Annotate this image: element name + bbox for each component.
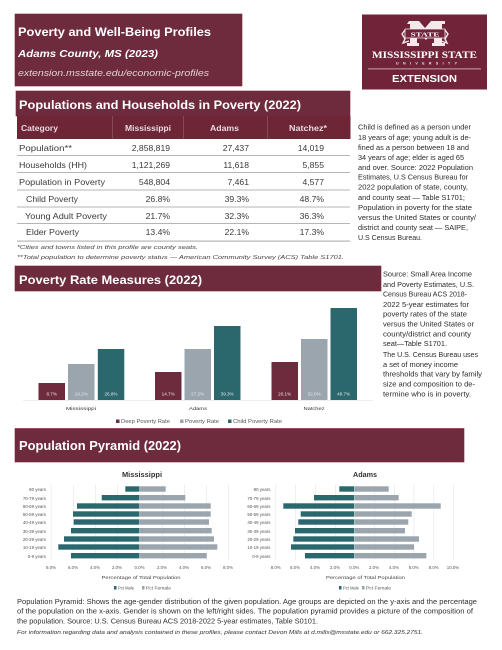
text block: poverty rate sources: thresholds that vary by family: [383, 372, 483, 378]
text block: population definitions and sources: Population in poverty for the state: [358, 205, 472, 212]
table header row: Adams: [210, 124, 240, 133]
bars: Natchez: [272, 308, 357, 411]
footnotes: **Total population to determine poverty status — American Community Survey (ACS) Table S1701.: [17, 255, 344, 261]
x-axis labels: 6.0%: [409, 565, 419, 570]
x-axis labels: 6.0%: [290, 565, 300, 570]
bars: Mississippi: 19.2%: [75, 392, 88, 396]
text block: poverty rate sources: size and composition to de-: [383, 382, 476, 388]
pyramid legend: Pct Male: [118, 586, 135, 590]
row: young adult poverty: Young Adult Poverty: [25, 211, 108, 221]
text block: pyramid explanation: of the population on the x-axis. Gender is shown on the left/right sides. The population pyramid provides a picture of the composition of: [17, 608, 473, 616]
bars: Mississippi: [38, 349, 124, 411]
row: child poverty: Child Poverty: [26, 194, 79, 204]
row: households: [19, 160, 324, 170]
row: population: 27,437: [223, 143, 249, 153]
panel: title banner: Poverty and Well-Being Profiles: [18, 27, 211, 39]
footnotes: *Cities and towns listed in this profile are county seats.: [17, 245, 198, 251]
text block: population definitions and sources: versus the United States or county/: [358, 215, 476, 222]
contact note: For information regarding data and analysis contained in these profiles, please contact Devon Mills at d.mills@msstate.edu or 662.325.2751.: [17, 630, 423, 636]
pyramid legend: [114, 586, 172, 590]
age labels: [247, 487, 271, 559]
text block: poverty rate sources: and Poverty Estimates, U.S.: [383, 282, 474, 289]
age labels: 30-39 years: [23, 529, 47, 534]
bars: Natchez: 32.0%: [308, 392, 321, 396]
x-axis labels: 8.0%: [271, 565, 281, 570]
text block: poverty rate sources: Census Bureau ACS 2018-: [383, 292, 468, 298]
age labels: 10-19 years: [23, 545, 47, 550]
x-axis labels: 8.0%: [46, 565, 56, 570]
x-axis labels: 8.0%: [429, 565, 439, 570]
text block: pyramid explanation: [17, 599, 477, 626]
text block: poverty rate sources: The U.S. Census Bureau uses: [383, 352, 478, 359]
pyramid legend: [339, 586, 392, 590]
age labels: 80 years: [29, 487, 47, 492]
table header row: [17, 116, 350, 139]
age labels: 50-59 years: [23, 512, 47, 517]
panel: title banner: [15, 14, 242, 86]
heading: poverty rate measures: Poverty Rate Measures (2022): [19, 273, 202, 287]
text block: population definitions and sources: 34 years of age; elder is aged 65: [358, 155, 464, 162]
row: population: 2,858,819: [132, 143, 170, 153]
table header row: Mississippi: [125, 124, 171, 133]
x-axis labels: 4.0%: [90, 565, 100, 570]
heading: population pyramid: [15, 428, 464, 462]
row: population: 14,019: [298, 143, 324, 153]
row: young adult poverty: 21.7%: [146, 211, 170, 221]
bars: Mississippi: 26.8%: [104, 392, 118, 396]
female bars: [355, 486, 441, 558]
row: households: Households (HH): [19, 160, 87, 170]
chart legend: Child Poverty Rate: [233, 419, 282, 425]
row: elder poverty: Elder Poverty: [26, 227, 80, 237]
bars: Natchez: 48.7%: [337, 392, 350, 396]
x-axis labels: 2.0%: [112, 565, 122, 570]
row: elder poverty: [26, 227, 324, 237]
text block: poverty rate sources: county/district and county: [383, 332, 472, 338]
logo: Mississippi State University Extension: [362, 14, 487, 90]
bars: Natchez: Natchez: [304, 406, 324, 411]
table: poverty figures: [17, 116, 350, 242]
age labels: 70-79 years: [247, 496, 271, 501]
x-axis labels: [46, 565, 233, 581]
text block: population definitions and sources: and county seat — Table S1701;: [358, 195, 465, 202]
age labels: [23, 487, 47, 559]
age labels: 20-29 years: [247, 537, 271, 542]
age labels: 60-69 years: [247, 504, 271, 509]
age labels: 70-79 years: [23, 496, 47, 501]
chart legend: Deep Poverty Rate: [121, 419, 170, 425]
heading: poverty rate measures: [15, 266, 381, 291]
age labels: 40-49 years: [23, 520, 47, 525]
chart: Adams pyramid: [247, 472, 459, 590]
row: population in poverty: 548,804: [139, 177, 170, 187]
x-axis labels: 4.0%: [389, 565, 399, 570]
row: population: [19, 143, 324, 153]
text block: pyramid explanation: the population. Source: U.S. Census Bureau ACS 2018-2022 5-year estimates, Table S0101.: [17, 618, 318, 626]
x-axis labels: 2.0%: [157, 565, 167, 570]
x-axis labels: Percentage of Total Population: [326, 575, 405, 581]
row: child poverty: 39.3%: [225, 194, 249, 204]
text block: population definitions and sources: fined as a person between 18 and: [358, 145, 469, 152]
pyramid legend: Pct Female: [366, 586, 392, 590]
row: households: 1,121,269: [132, 160, 170, 170]
row: population in poverty: Population in Poverty: [19, 177, 106, 187]
row: elder poverty: 17.3%: [300, 227, 324, 237]
panel: title banner: Adams County, MS (2023): [17, 48, 159, 60]
bars: Adams: 27.2%: [191, 392, 204, 396]
bars: Adams: [155, 326, 240, 411]
age labels: 80 years: [254, 487, 271, 492]
heading: populations and households: [16, 91, 350, 116]
text block: poverty rate sources: Source: Small Area Income: [383, 272, 472, 278]
bars: Mississippi: 8.7%: [46, 392, 57, 396]
row: child poverty: 48.7%: [300, 194, 324, 204]
row: child poverty: 26.8%: [146, 194, 170, 204]
row: population in poverty: 7,461: [227, 177, 249, 187]
male bars: [58, 486, 139, 558]
x-axis labels: 4.0%: [310, 565, 320, 570]
row: population: Population**: [19, 143, 73, 153]
row: young adult poverty: 36.3%: [300, 211, 324, 221]
male bars: [283, 486, 354, 558]
row: population in poverty: [19, 177, 324, 187]
row: young adult poverty: 32.3%: [225, 211, 249, 221]
text block: population definitions and sources: [358, 124, 476, 242]
chart legend: Poverty Rate: [185, 419, 219, 425]
x-axis labels: 6.0%: [201, 565, 211, 570]
text block: poverty rate sources: poverty rates of the state: [383, 312, 467, 318]
logo: Mississippi State University Extension: STATE: [410, 31, 440, 38]
x-axis labels: 0.0%: [134, 565, 145, 570]
x-axis labels: 4.0%: [179, 565, 189, 570]
bar chart: poverty rates: [23, 308, 373, 425]
row: elder poverty: 22.1%: [225, 227, 249, 237]
pyramid legend: Pct Female: [146, 586, 172, 590]
age labels: 20-29 years: [23, 537, 47, 542]
pyramid legend: Pct Male: [343, 586, 360, 590]
age labels: 50-59 years: [247, 512, 271, 517]
row: households: 5,855: [302, 160, 324, 170]
text block: pyramid explanation: Population Pyramid: Shows the age-gender distribution of the given population. Age groups are depicted on the y-axis and the percentage: [17, 599, 477, 606]
text block: poverty rate sources: termine who is in poverty.: [383, 392, 471, 398]
panel: title banner: extension.msstate.edu/economic-profiles: [18, 68, 210, 78]
text block: poverty rate sources: a set of money income: [383, 362, 458, 369]
age labels: 0-9 years: [28, 554, 47, 559]
age labels: 60-69 years: [23, 504, 47, 509]
chart: Mississippi pyramid: [23, 472, 233, 590]
text block: population definitions and sources: U.S Census Bureau.: [358, 235, 422, 242]
footnotes: [17, 245, 344, 261]
chart: Adams pyramid: Adams: [353, 472, 377, 479]
heading: populations and households: Populations and Households in Poverty (2022): [19, 98, 301, 112]
text block: population definitions and sources: and over. Source: 2022 Population: [358, 165, 473, 172]
text block: population definitions and sources: 18 years of age; young adult is de-: [358, 135, 472, 142]
text block: poverty rate sources: [383, 272, 483, 398]
age labels: 0-9 years: [252, 554, 271, 559]
text block: population definitions and sources: Child is defined as a person under: [358, 124, 472, 132]
chart: Mississippi pyramid: Mississippi: [122, 472, 162, 479]
bars: Adams: 39.3%: [221, 392, 234, 396]
text block: population definitions and sources: district and county seat — SAIPE,: [358, 225, 468, 232]
text block: poverty rate sources: versus the United States or: [383, 322, 475, 328]
bars: Natchez: 20.1%: [278, 392, 291, 396]
text block: poverty rate sources: 2022 5-year estimates for: [383, 302, 470, 309]
age labels: 10-19 years: [247, 545, 271, 550]
row: elder poverty: 13.4%: [146, 227, 170, 237]
bars: Adams: 14.7%: [162, 392, 175, 396]
x-axis labels: 8.0%: [223, 565, 233, 570]
x-axis labels: 10.0%: [447, 565, 459, 570]
row: young adult poverty: [25, 211, 324, 221]
text block: poverty rate sources: seat—Table S1701.: [383, 341, 447, 348]
bars: Adams: Adams: [189, 406, 208, 411]
x-axis labels: [271, 565, 459, 581]
text block: population definitions and sources: Estimates, U.S Census Bureau for: [358, 174, 469, 182]
heading: population pyramid: Population Pyramid (2022): [19, 438, 181, 453]
table header row: Category: [21, 124, 59, 133]
x-axis labels: 6.0%: [68, 565, 78, 570]
table header row: Natchez*: [289, 124, 328, 133]
logo: Mississippi State University Extension: MISSISSIPPI STATE: [372, 51, 477, 61]
x-axis labels: 2.0%: [369, 565, 379, 570]
row: households: 11,618: [223, 160, 249, 170]
row: child poverty: [26, 194, 324, 204]
x-axis labels: 2.0%: [330, 565, 340, 570]
bars: Mississippi: Mississippi: [66, 406, 96, 411]
x-axis labels: Percentage of Total Population: [102, 575, 181, 581]
x-axis labels: 0.0%: [349, 565, 359, 570]
chart legend: [116, 419, 282, 425]
logo: Mississippi State University Extension: UNIVERSITY: [396, 62, 458, 66]
age labels: 40-49 years: [247, 520, 271, 525]
age labels: 30-39 years: [247, 529, 271, 534]
row: population in poverty: 4,577: [302, 177, 324, 187]
text block: population definitions and sources: 2022 population of state, county,: [358, 184, 468, 192]
logo: Mississippi State University Extension: EXTENSION: [392, 74, 457, 85]
female bars: [140, 486, 217, 558]
